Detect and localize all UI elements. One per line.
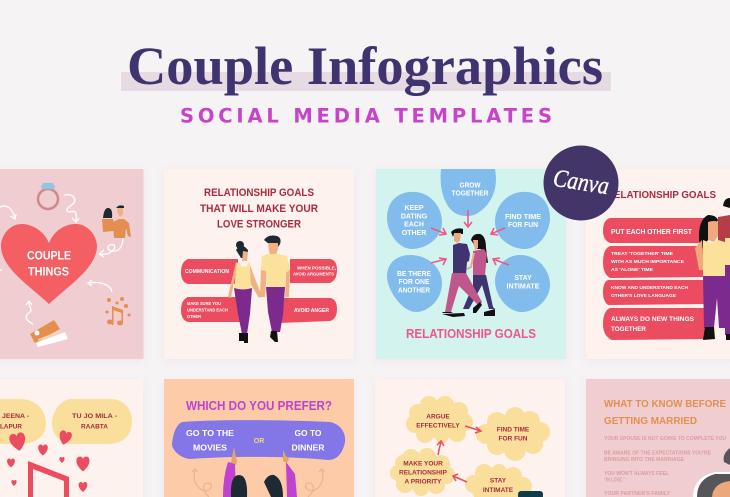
list text: WITH AS MUCH IMPORTANCE bbox=[611, 259, 685, 265]
heading: THAT WILL MAKE YOUR bbox=[200, 203, 318, 215]
blob labels bbox=[397, 182, 541, 294]
speech labels: LAPUR bbox=[0, 424, 23, 430]
bar labels: AVOID ANGER bbox=[294, 308, 329, 314]
cloud labels: STAY bbox=[490, 478, 507, 484]
heading bbox=[604, 398, 726, 427]
panel: couple things bbox=[0, 169, 144, 359]
list text: PUT EACH OTHER FIRST bbox=[611, 227, 692, 236]
cloud labels: MAKE YOUR bbox=[403, 460, 443, 468]
purple choice bar bbox=[172, 420, 345, 460]
panel: relationship goals list bbox=[586, 169, 730, 359]
cloud labels: A PRIORITY bbox=[405, 478, 442, 486]
list text bbox=[611, 227, 694, 333]
heading: RELATIONSHIP GOALS bbox=[204, 187, 314, 199]
red bars bbox=[181, 259, 337, 323]
list bars bbox=[603, 218, 710, 340]
blob labels: BE THERE bbox=[397, 271, 431, 278]
arrows bbox=[0, 195, 123, 324]
blob labels: DATING bbox=[401, 214, 428, 220]
woman figure bbox=[693, 448, 730, 497]
icon: couple bbox=[102, 205, 131, 238]
or label: OR bbox=[254, 438, 264, 445]
icon: canva badge bbox=[544, 146, 618, 220]
panel: song hearts bbox=[0, 379, 143, 497]
list text: KNOW AND UNDERSTAND EACH bbox=[611, 285, 689, 291]
heading: RELATIONSHIP GOALS bbox=[406, 327, 536, 341]
blob labels: GROW bbox=[460, 182, 481, 190]
bar labels: MAKE SURE YOU bbox=[187, 301, 221, 306]
arrows bbox=[431, 210, 509, 265]
woman figure bbox=[463, 234, 495, 316]
list text: TOGETHER bbox=[611, 326, 646, 333]
cloud labels: INTIMATE bbox=[483, 487, 514, 494]
blob labels: KEEP bbox=[404, 205, 424, 212]
bar labels: AVOID ARGUMENTS bbox=[293, 272, 334, 276]
cloud labels: RELATIONSHIP bbox=[399, 470, 448, 476]
man figure bbox=[260, 236, 290, 342]
body text: YOU WON'T ALWAYS FEEL bbox=[604, 471, 669, 477]
curly arrows bbox=[192, 469, 325, 497]
figure fragment bbox=[518, 491, 543, 497]
blob labels: FIND TIME bbox=[505, 214, 541, 221]
icon: canva badge: Canva bbox=[551, 165, 611, 200]
heading: GETTING MARRIED bbox=[604, 415, 697, 427]
choice labels: MOVIES bbox=[193, 442, 227, 452]
hearts and note bbox=[7, 430, 90, 497]
panel: relationship goals blobs bbox=[376, 169, 566, 359]
list text: TREAT 'TOGETHER' TIME bbox=[611, 251, 674, 257]
choice labels: DINNER bbox=[292, 442, 324, 452]
bar labels: COMMUNICATION bbox=[185, 269, 229, 275]
bar labels bbox=[185, 266, 336, 319]
cloud labels: FOR FUN bbox=[499, 436, 528, 442]
list text: OTHER'S LOVE LANGUAGE bbox=[611, 293, 677, 299]
speech labels: JEENA - bbox=[2, 414, 29, 420]
list text: AS 'ALONE' TIME bbox=[611, 267, 654, 273]
blob labels: TOGETHER bbox=[452, 190, 488, 198]
speech labels: RAABTA bbox=[81, 424, 109, 430]
heading bbox=[200, 187, 318, 230]
bar labels: UNDERSTAND EACH bbox=[187, 308, 228, 312]
cloud labels: ARGUE bbox=[426, 414, 450, 420]
body text: BRINGING INTO THE MARRIAGE bbox=[604, 457, 685, 463]
blob labels: EACH bbox=[404, 222, 424, 228]
blob labels: FOR FUN bbox=[508, 222, 538, 229]
heart with text: COUPLE bbox=[27, 250, 71, 262]
subtitle: SOCIAL MEDIA TEMPLATES bbox=[180, 104, 552, 128]
title band bbox=[121, 72, 611, 91]
body text: BE AWARE OF THE EXPECTATIONS YOU'RE bbox=[604, 450, 712, 456]
choice labels: GO TO THE bbox=[186, 428, 234, 438]
blob labels: STAY bbox=[514, 275, 532, 282]
title: Couple Infographics bbox=[127, 36, 603, 96]
panel: what to know bbox=[586, 379, 730, 497]
blob labels: INTIMATE bbox=[506, 284, 540, 290]
blob labels: ANOTHER bbox=[398, 288, 430, 294]
blobs bbox=[387, 169, 550, 312]
speech labels: TU JO MILA - bbox=[72, 414, 117, 420]
choice labels: GO TO bbox=[294, 428, 322, 438]
body text bbox=[604, 436, 726, 497]
body text: "IN LOVE." bbox=[604, 478, 625, 484]
panel: relationship goals love stronger bbox=[164, 169, 354, 359]
man figure bbox=[442, 228, 482, 317]
blob labels: FOR ONE bbox=[398, 279, 430, 286]
icon: ring bbox=[38, 183, 58, 209]
body text: YOUR SPOUSE IS NOT GOING TO COMPLETE YOU bbox=[604, 436, 726, 442]
heart with text: THINGS bbox=[28, 266, 69, 278]
cloud labels: EFFECTIVELY bbox=[416, 422, 460, 430]
heart with text bbox=[1, 224, 97, 304]
bar labels: WHEN POSSIBLE, bbox=[297, 266, 336, 270]
woman figure bbox=[228, 241, 262, 343]
couple figure bbox=[695, 198, 730, 340]
heading: LOVE STRONGER bbox=[217, 218, 301, 230]
choice labels bbox=[186, 428, 324, 452]
bar labels: OTHER bbox=[187, 314, 202, 319]
speech blobs bbox=[0, 399, 46, 444]
list text: ALWAYS DO NEW THINGS bbox=[611, 316, 694, 323]
icon: tickets bbox=[30, 320, 68, 347]
arrows bbox=[437, 426, 481, 482]
panel: which do you prefer bbox=[164, 379, 354, 497]
icon: music notes bbox=[106, 297, 130, 326]
cloud labels: FIND TIME bbox=[497, 426, 530, 434]
speech labels bbox=[0, 414, 117, 430]
heading: RELATIONSHIP GOALS bbox=[607, 190, 716, 201]
blob labels: OTHER bbox=[402, 230, 426, 237]
people pointing bbox=[223, 447, 297, 497]
clouds bbox=[390, 396, 550, 497]
body text: YOUR PARTNER'S FAMILY bbox=[604, 491, 671, 497]
cloud labels bbox=[399, 414, 530, 494]
heading: WHICH DO YOU PREFER? bbox=[186, 399, 332, 413]
panel: cloud flow bbox=[375, 379, 565, 497]
